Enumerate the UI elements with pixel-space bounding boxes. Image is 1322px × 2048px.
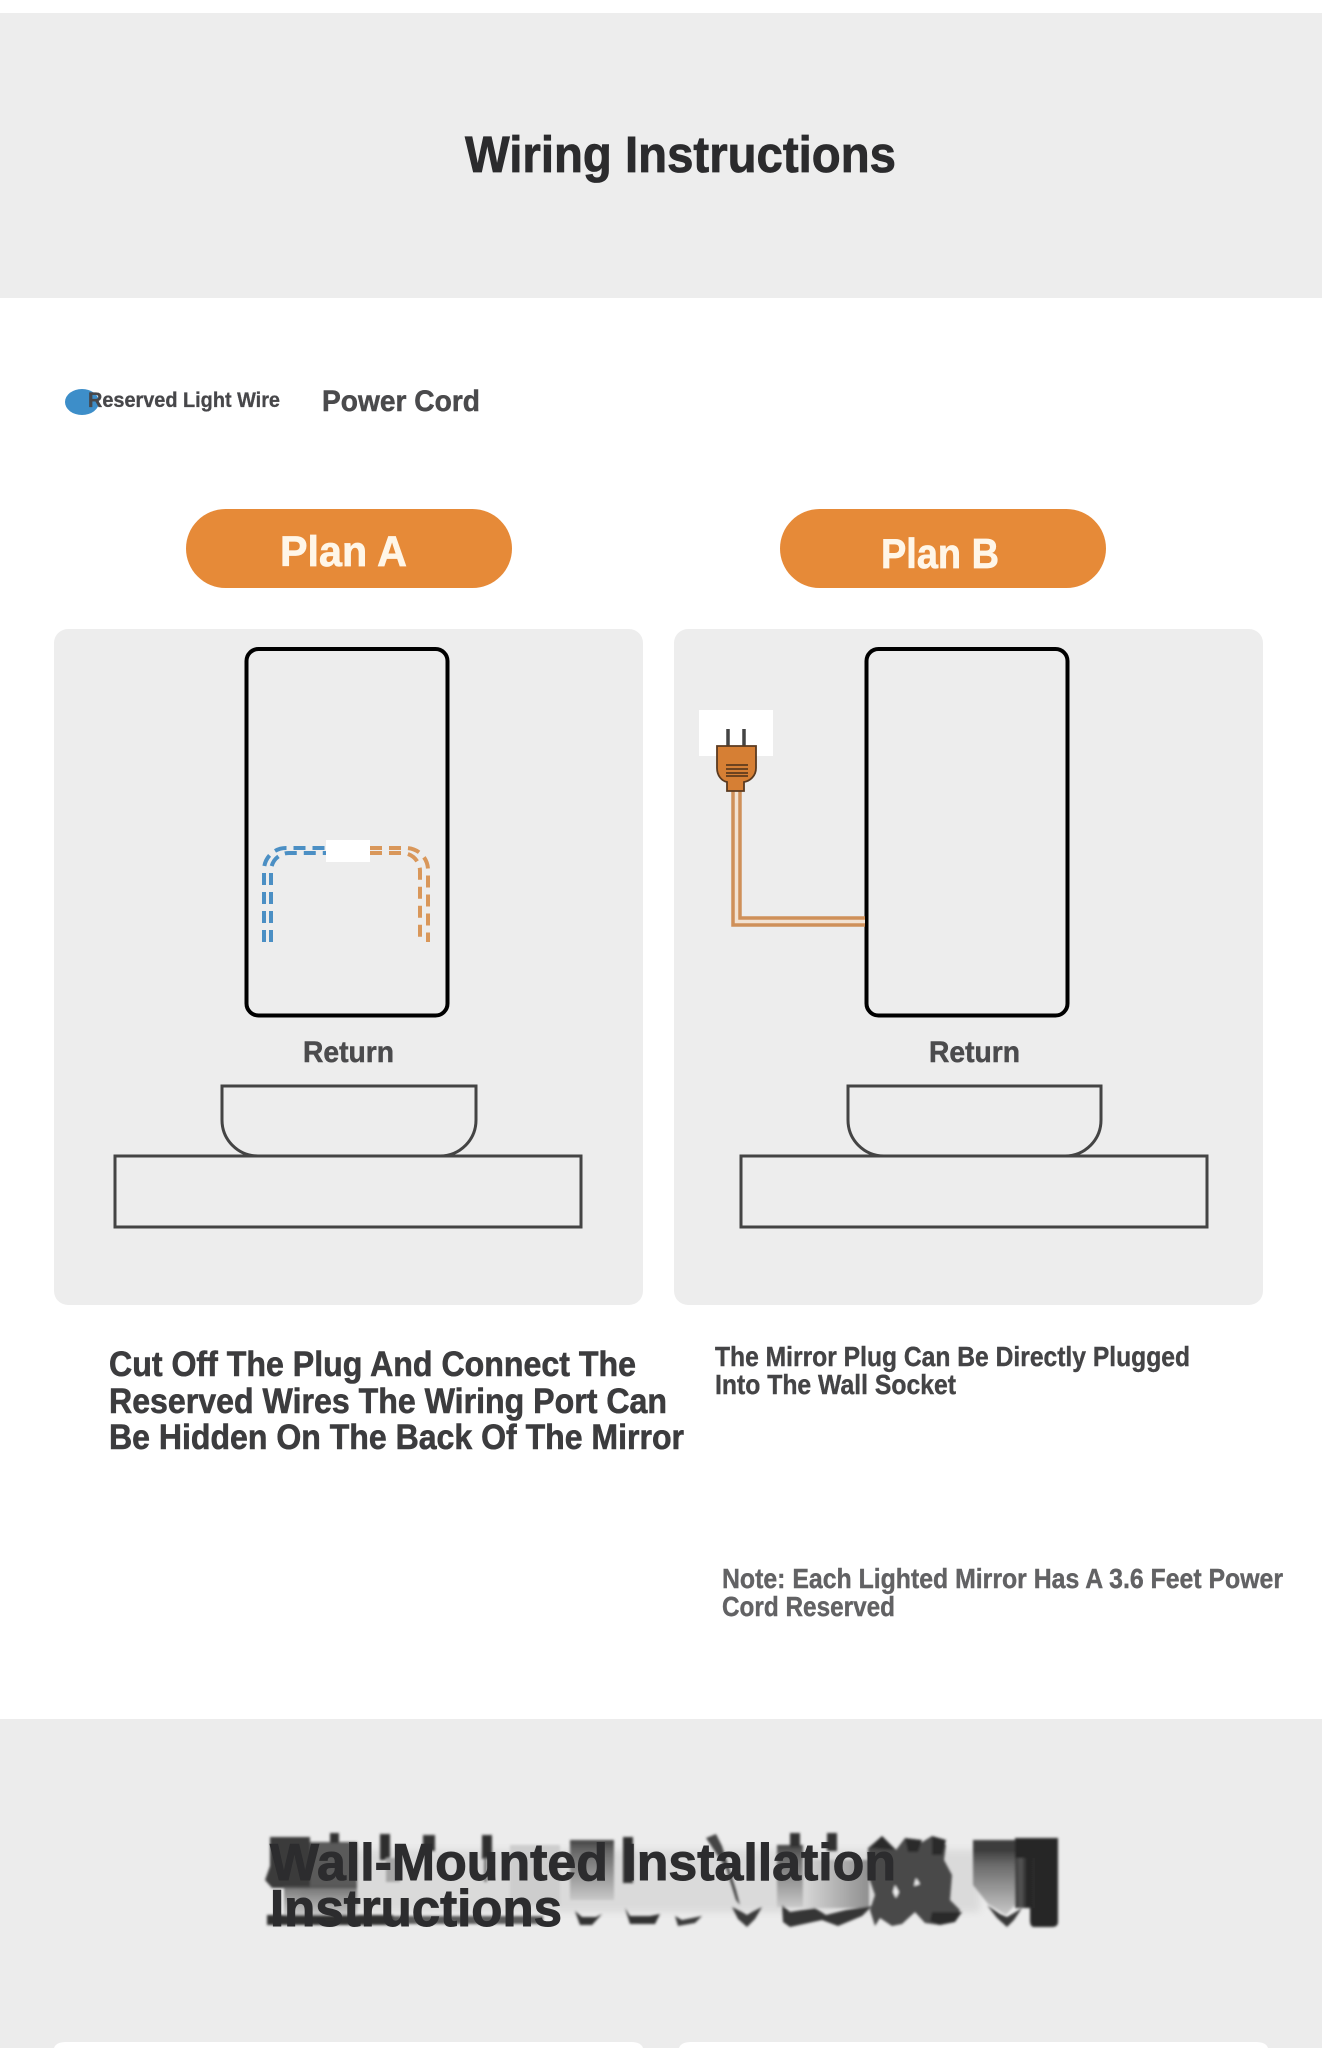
- white connector block: [326, 840, 370, 862]
- legend label: power cord: Power Cord: [322, 385, 480, 418]
- white socket block: [699, 710, 773, 756]
- button: plan B: [780, 509, 1106, 588]
- text block: plan A description: Cut Off The Plug And Connect The: [109, 1345, 636, 1384]
- icon: blue wire dot: [65, 389, 99, 415]
- button: plan B: Plan B: [881, 530, 999, 577]
- title: Wiring Instructions: [465, 126, 896, 183]
- legend: [65, 385, 480, 418]
- button: plan A: Plan A: [280, 528, 407, 576]
- card tops: [54, 2042, 1268, 2048]
- orange dashed wire: [370, 848, 428, 942]
- text block: plan B description: Into The Wall Socket: [715, 1369, 956, 1400]
- button: plan A: [186, 509, 512, 588]
- basin B: [848, 1086, 1101, 1156]
- panel: plan B diagram: [674, 629, 1263, 1305]
- panel: plan A diagram: [54, 629, 643, 1305]
- heading: wall-mounted installation instructions: Instructions: [270, 1880, 562, 1938]
- power cord: [733, 790, 865, 925]
- footer band: wall-mounted installation: [0, 1719, 1322, 2048]
- legend label: reserved light wire: Reserved Light Wire: [88, 389, 280, 412]
- header band: wiring instructions: [0, 13, 1322, 298]
- heading: wall-mounted installation instructions: Wall-Mounted Installation: [270, 1834, 896, 1892]
- text block: plan B description: [715, 1341, 1190, 1400]
- smeared heading background: [265, 1833, 1058, 1927]
- label: return: Return: [303, 1036, 394, 1069]
- note text: Cord Reserved: [722, 1591, 895, 1622]
- text block: plan A description: Reserved Wires The Wiring Port Can: [109, 1382, 667, 1421]
- basin A: [222, 1086, 476, 1156]
- note text: [722, 1563, 1283, 1622]
- heading: wall-mounted installation instructions: [270, 1834, 896, 1938]
- text block: plan A description: Be Hidden On The Back Of The Mirror: [109, 1418, 684, 1457]
- mirror outline B: [866, 649, 1068, 1016]
- icon: plug: [717, 729, 756, 791]
- text block: plan A description: [109, 1345, 684, 1457]
- blue dashed wire: [264, 848, 327, 942]
- mirror outline A: [246, 649, 448, 1016]
- counter A: [115, 1156, 581, 1227]
- text block: plan B description: The Mirror Plug Can Be Directly Plugged: [715, 1341, 1190, 1372]
- label: return: Return: [929, 1036, 1020, 1069]
- counter B: [741, 1156, 1207, 1227]
